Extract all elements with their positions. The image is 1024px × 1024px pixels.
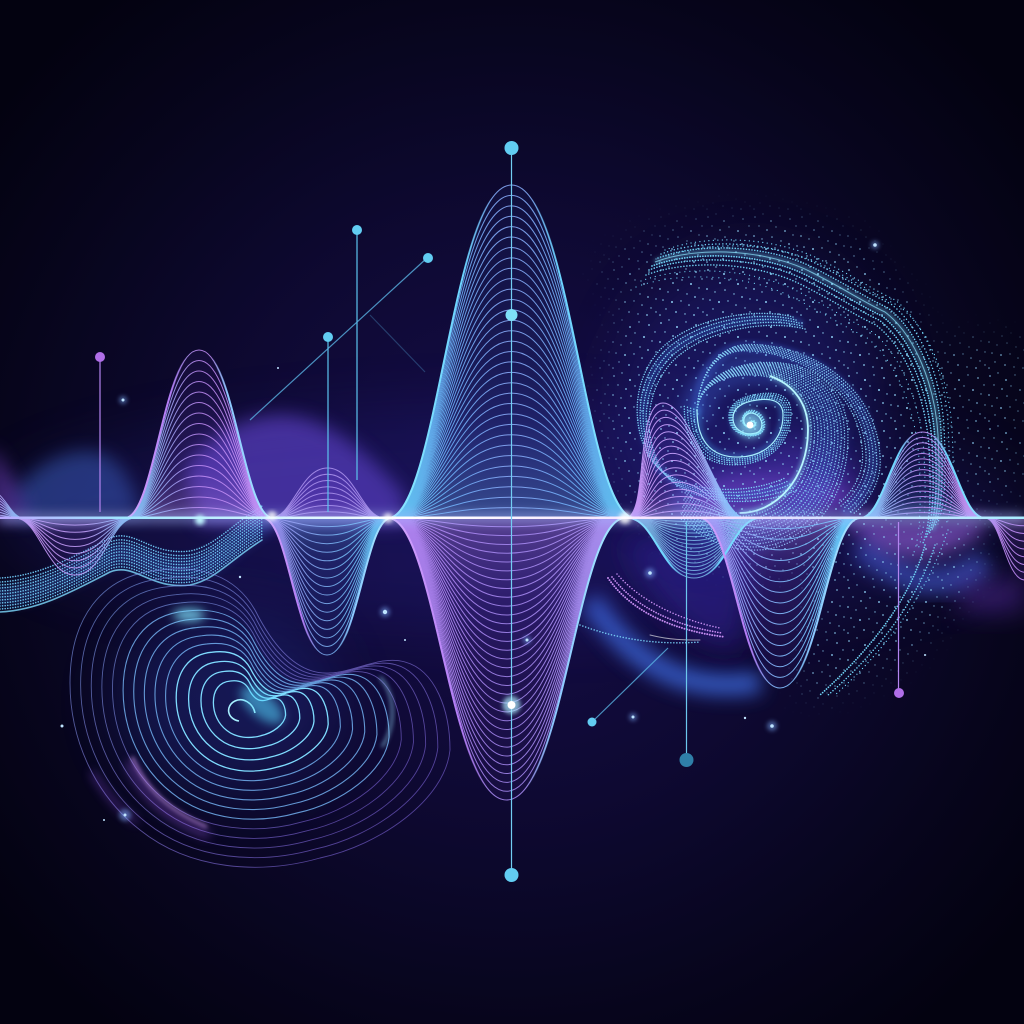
lobe fills bbox=[15, 185, 1024, 800]
pin: short blue bbox=[323, 332, 333, 512]
pin: centre axis bbox=[502, 141, 520, 882]
data pins bbox=[95, 141, 904, 882]
particle cloud around right spiral bbox=[588, 198, 1024, 709]
right upper lobe bbox=[860, 432, 985, 518]
far-right lower lobe bbox=[985, 518, 1024, 580]
pin: lower purple bbox=[894, 522, 904, 698]
small upper lobe bbox=[270, 468, 385, 518]
spiral: wide funnel ribbon bbox=[681, 344, 880, 550]
left particle ribbon bbox=[0, 506, 262, 612]
spiral: bright inner edge of main ribbon bbox=[740, 376, 808, 513]
bottom-left kidney spiral bbox=[70, 569, 450, 867]
pin: tall blue bbox=[352, 225, 362, 480]
pin: left purple bbox=[95, 352, 105, 512]
central tall upper wave lobe bbox=[388, 185, 635, 518]
spiral: bright inner coil bbox=[684, 393, 791, 465]
pink particle strands bbox=[580, 574, 725, 643]
glowing particles bbox=[60, 241, 926, 821]
spiral: middle ribbon bbox=[637, 313, 805, 501]
pin: lower diagonal bbox=[588, 648, 668, 726]
far-left wave lobes bbox=[0, 490, 135, 575]
right skewed upper lobe bbox=[603, 403, 745, 518]
right shallow mesh lobe bbox=[628, 518, 760, 578]
spiral: outer particle arm bbox=[636, 240, 953, 695]
right deep lower lobe bbox=[700, 518, 860, 688]
lower blue lobe bbox=[263, 518, 391, 655]
blurred glow band behind the waveform bbox=[0, 260, 1024, 685]
pin: lower teal bbox=[680, 522, 694, 767]
baseline glowing line bbox=[0, 511, 1024, 525]
lobe bright edges bbox=[125, 185, 985, 800]
left purple upper lobe bbox=[125, 350, 273, 518]
pin: diagonal bbox=[250, 253, 433, 420]
central deep lower wave lobe bbox=[388, 518, 625, 800]
